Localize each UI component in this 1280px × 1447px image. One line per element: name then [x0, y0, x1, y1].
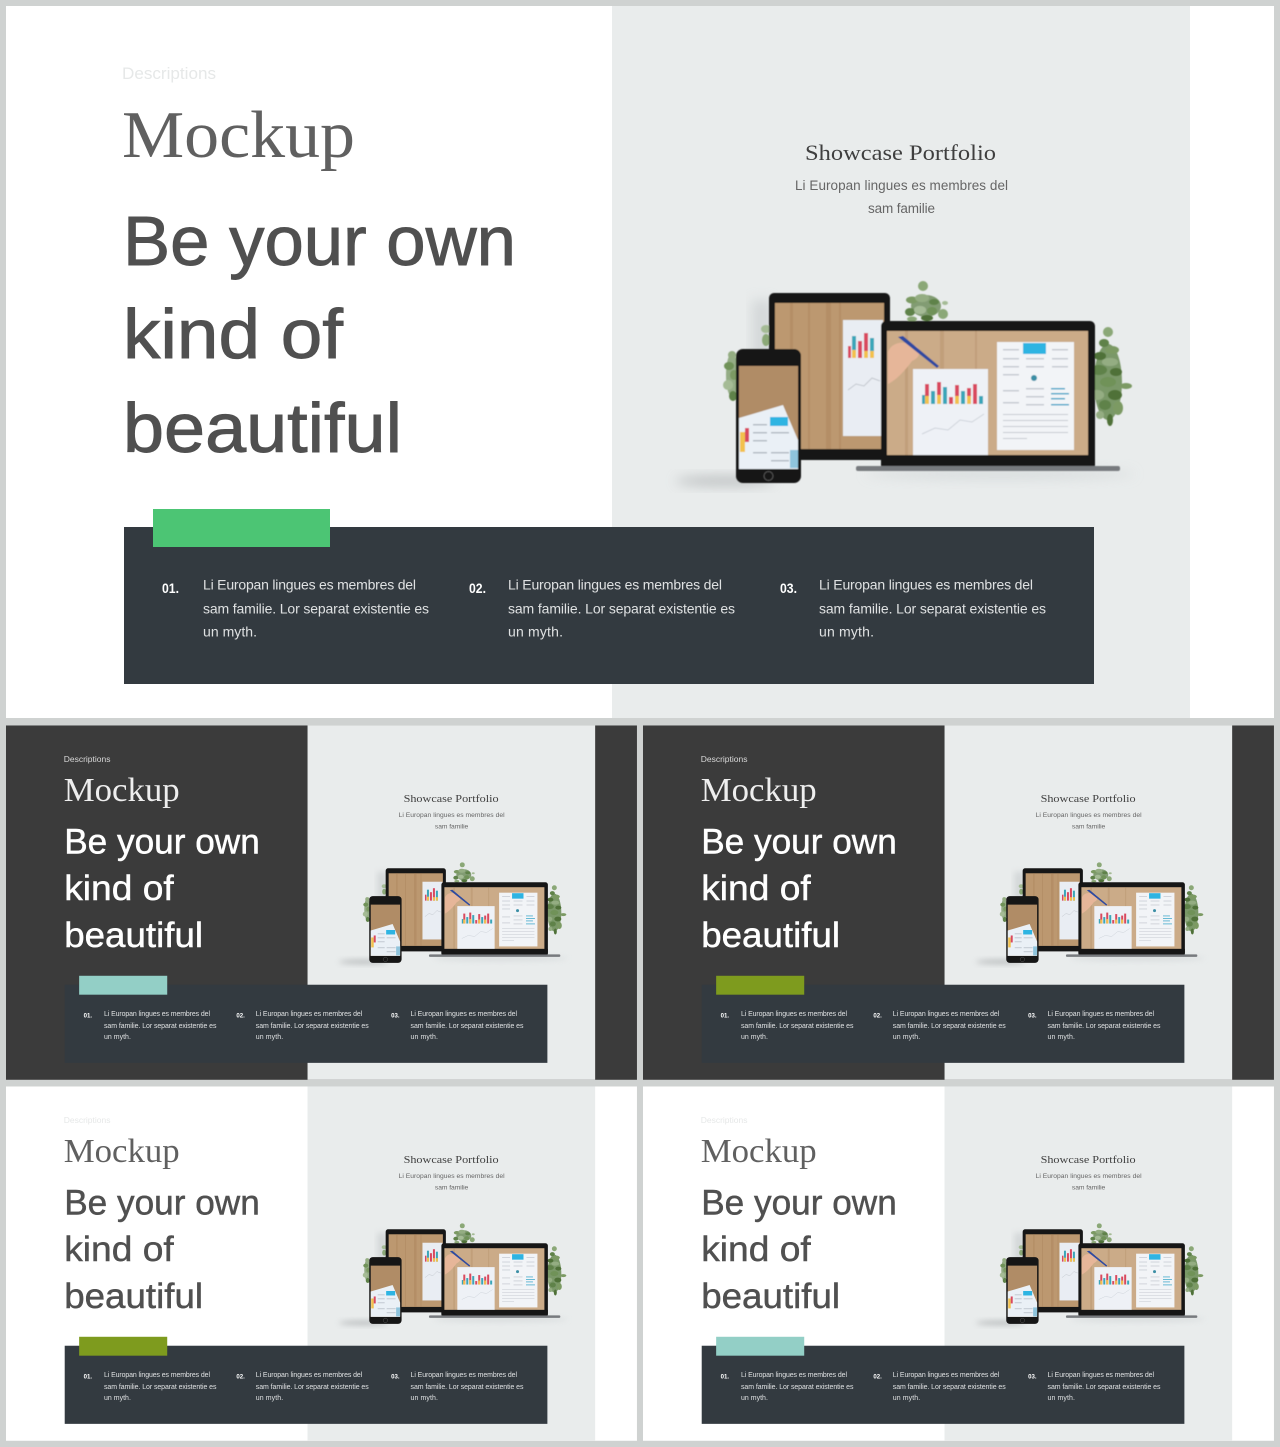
item 01	[162, 576, 429, 640]
item 01: 01.	[162, 581, 179, 596]
item 01: un myth.	[104, 1034, 131, 1041]
dark info bar	[702, 1346, 1184, 1424]
portfolio description: sam familie	[435, 1184, 469, 1191]
illustration: devices mockup	[675, 281, 1135, 485]
item 03: Li Europan lingues es membres del	[1048, 1372, 1154, 1379]
item 02: 02.	[236, 1013, 245, 1020]
item 01: sam familie. Lor separat existentie es	[741, 1384, 854, 1391]
headline: kind of	[701, 1230, 811, 1269]
portfolio description: Li Europan lingues es membres del	[795, 178, 1008, 193]
portfolio heading: Showcase Portfolio	[1041, 1154, 1136, 1166]
eyebrow text: Descriptions	[701, 1115, 747, 1125]
headline: kind of	[123, 295, 344, 373]
item 01: Li Europan lingues es membres del	[741, 1011, 847, 1018]
accent block	[79, 1337, 167, 1356]
portfolio description: Li Europan lingues es membres del	[1036, 812, 1142, 819]
item 03: sam familie. Lor separat existentie es	[1048, 1384, 1161, 1391]
title: Mockup	[122, 98, 355, 172]
panel: light slide with teal accent	[643, 1086, 1274, 1441]
item 01: Li Europan lingues es membres del	[104, 1011, 210, 1018]
item 01	[84, 1011, 217, 1041]
right grey panel	[612, 6, 1190, 718]
item 01	[721, 1011, 854, 1041]
portfolio description: Li Europan lingues es membres del	[399, 812, 505, 819]
item 02: un myth.	[893, 1034, 920, 1041]
eyebrow text: Descriptions	[64, 1115, 110, 1125]
portfolio description: sam familie	[1072, 1184, 1106, 1191]
item 01: sam familie. Lor separat existentie es	[741, 1023, 854, 1030]
item 02: Li Europan lingues es membres del	[256, 1011, 363, 1018]
item 02: un myth.	[256, 1034, 283, 1041]
panel: dark slide with teal accent	[6, 725, 637, 1080]
illustration: devices mockup	[976, 862, 1205, 964]
item 03: un myth.	[411, 1395, 438, 1402]
item 03: 03.	[780, 581, 797, 596]
headline: beautiful	[64, 1277, 203, 1316]
headline: Be your own	[64, 822, 260, 861]
item 01	[84, 1372, 217, 1402]
item 01: sam familie. Lor separat existentie es	[104, 1384, 217, 1391]
panel: main slide	[6, 6, 1274, 718]
item 02: Li Europan lingues es membres del	[893, 1372, 1000, 1379]
item 01: 01.	[84, 1013, 92, 1020]
headline: beautiful	[123, 389, 402, 467]
item 02: 02.	[873, 1013, 882, 1020]
portfolio description: sam familie	[868, 201, 935, 216]
item 02	[873, 1011, 1006, 1041]
dark info bar	[65, 985, 547, 1063]
portfolio description	[1036, 812, 1142, 830]
dark info bar	[124, 527, 1094, 684]
portfolio description: sam familie	[435, 823, 469, 830]
item 02: Li Europan lingues es membres del	[508, 576, 722, 592]
item 02: un myth.	[256, 1395, 283, 1402]
slide background	[6, 725, 637, 1080]
item 03: sam familie. Lor separat existentie es	[411, 1023, 524, 1030]
headline	[64, 822, 260, 955]
item 01	[721, 1372, 854, 1402]
right grey panel	[945, 725, 1232, 1080]
item 01: sam familie. Lor separat existentie es	[104, 1023, 217, 1030]
headline: Be your own	[64, 1183, 260, 1222]
headline: Be your own	[123, 202, 516, 280]
illustration: devices mockup	[339, 1223, 568, 1325]
item 02: Li Europan lingues es membres del	[893, 1011, 1000, 1018]
item 01: un myth.	[741, 1034, 768, 1041]
portfolio description: Li Europan lingues es membres del	[399, 1173, 505, 1180]
item 03	[1028, 1011, 1161, 1041]
item 02: sam familie. Lor separat existentie es	[893, 1384, 1006, 1391]
item 03: un myth.	[411, 1034, 438, 1041]
headline: beautiful	[64, 916, 203, 955]
dark info bar	[65, 1346, 547, 1424]
eyebrow text: Descriptions	[64, 754, 110, 764]
item 01: un myth.	[203, 624, 257, 640]
panel: dark slide with olive accent	[643, 725, 1274, 1080]
item 03: un myth.	[819, 624, 874, 640]
portfolio description: Li Europan lingues es membres del	[1036, 1173, 1142, 1180]
item 03: 03.	[1028, 1374, 1037, 1381]
portfolio heading: Showcase Portfolio	[805, 140, 996, 165]
item 01: 01.	[84, 1374, 92, 1381]
title: Mockup	[64, 772, 180, 809]
item 03: 03.	[1028, 1013, 1037, 1020]
portfolio heading: Showcase Portfolio	[404, 1154, 499, 1166]
item 02: sam familie. Lor separat existentie es	[256, 1023, 369, 1030]
item 03: sam familie. Lor separat existentie es	[819, 600, 1046, 616]
dark info bar	[702, 985, 1184, 1063]
panel: light slide with olive accent	[6, 1086, 637, 1441]
slide background	[643, 1086, 1274, 1441]
item 03: Li Europan lingues es membres del	[819, 576, 1033, 592]
item 02: un myth.	[508, 624, 563, 640]
illustration: devices mockup	[976, 1223, 1205, 1325]
item 03	[780, 576, 1046, 640]
item 03	[1028, 1372, 1161, 1402]
item 03	[391, 1011, 524, 1041]
item 01: 01.	[721, 1374, 729, 1381]
portfolio description	[399, 1173, 505, 1191]
item 02	[873, 1372, 1006, 1402]
item 01: Li Europan lingues es membres del	[741, 1372, 847, 1379]
headline: beautiful	[701, 916, 840, 955]
headline: beautiful	[701, 1277, 840, 1316]
portfolio description	[795, 178, 1008, 216]
item 02: sam familie. Lor separat existentie es	[256, 1384, 369, 1391]
title: Mockup	[701, 1133, 817, 1170]
eyebrow text: Descriptions	[122, 64, 216, 83]
item 03	[391, 1372, 524, 1402]
title: Mockup	[64, 1133, 180, 1170]
item 03: Li Europan lingues es membres del	[1048, 1011, 1154, 1018]
slide background	[643, 725, 1274, 1080]
portfolio description: sam familie	[1072, 823, 1106, 830]
item 02: 02.	[469, 581, 486, 596]
accent block	[716, 1337, 804, 1356]
item 02	[236, 1372, 369, 1402]
item 03: un myth.	[1048, 1395, 1075, 1402]
portfolio description	[399, 812, 505, 830]
item 02: 02.	[873, 1374, 882, 1381]
right grey panel	[308, 1086, 595, 1441]
slide background	[6, 6, 1274, 718]
headline: kind of	[701, 869, 811, 908]
item 02: un myth.	[893, 1395, 920, 1402]
item 01: un myth.	[104, 1395, 131, 1402]
item 02	[236, 1011, 369, 1041]
right grey panel	[308, 725, 595, 1080]
headline	[701, 822, 897, 955]
accent block	[79, 976, 167, 995]
item 03: un myth.	[1048, 1034, 1075, 1041]
portfolio description	[1036, 1173, 1142, 1191]
item 03: 03.	[391, 1013, 400, 1020]
illustration: devices mockup	[339, 862, 568, 964]
slide background	[6, 1086, 637, 1441]
portfolio heading: Showcase Portfolio	[404, 793, 499, 805]
headline	[64, 1183, 260, 1316]
item 03: Li Europan lingues es membres del	[411, 1011, 517, 1018]
right grey panel	[945, 1086, 1232, 1441]
item 03: sam familie. Lor separat existentie es	[1048, 1023, 1161, 1030]
headline: Be your own	[701, 1183, 897, 1222]
item 03: sam familie. Lor separat existentie es	[411, 1384, 524, 1391]
accent block	[153, 509, 330, 547]
accent block	[716, 976, 804, 995]
headline: kind of	[64, 869, 174, 908]
portfolio heading: Showcase Portfolio	[1041, 793, 1136, 805]
headline	[123, 202, 516, 467]
item 02: sam familie. Lor separat existentie es	[893, 1023, 1006, 1030]
item 02: 02.	[236, 1374, 245, 1381]
title: Mockup	[701, 772, 817, 809]
item 01: sam familie. Lor separat existentie es	[203, 600, 429, 616]
headline	[701, 1183, 897, 1316]
item 03: Li Europan lingues es membres del	[411, 1372, 517, 1379]
item 01: Li Europan lingues es membres del	[104, 1372, 210, 1379]
headline: Be your own	[701, 822, 897, 861]
item 01: 01.	[721, 1013, 729, 1020]
item 02	[469, 576, 735, 640]
item 02: sam familie. Lor separat existentie es	[508, 600, 735, 616]
item 01: un myth.	[741, 1395, 768, 1402]
eyebrow text: Descriptions	[701, 754, 747, 764]
headline: kind of	[64, 1230, 174, 1269]
item 02: Li Europan lingues es membres del	[256, 1372, 363, 1379]
item 01: Li Europan lingues es membres del	[203, 576, 416, 592]
item 03: 03.	[391, 1374, 400, 1381]
